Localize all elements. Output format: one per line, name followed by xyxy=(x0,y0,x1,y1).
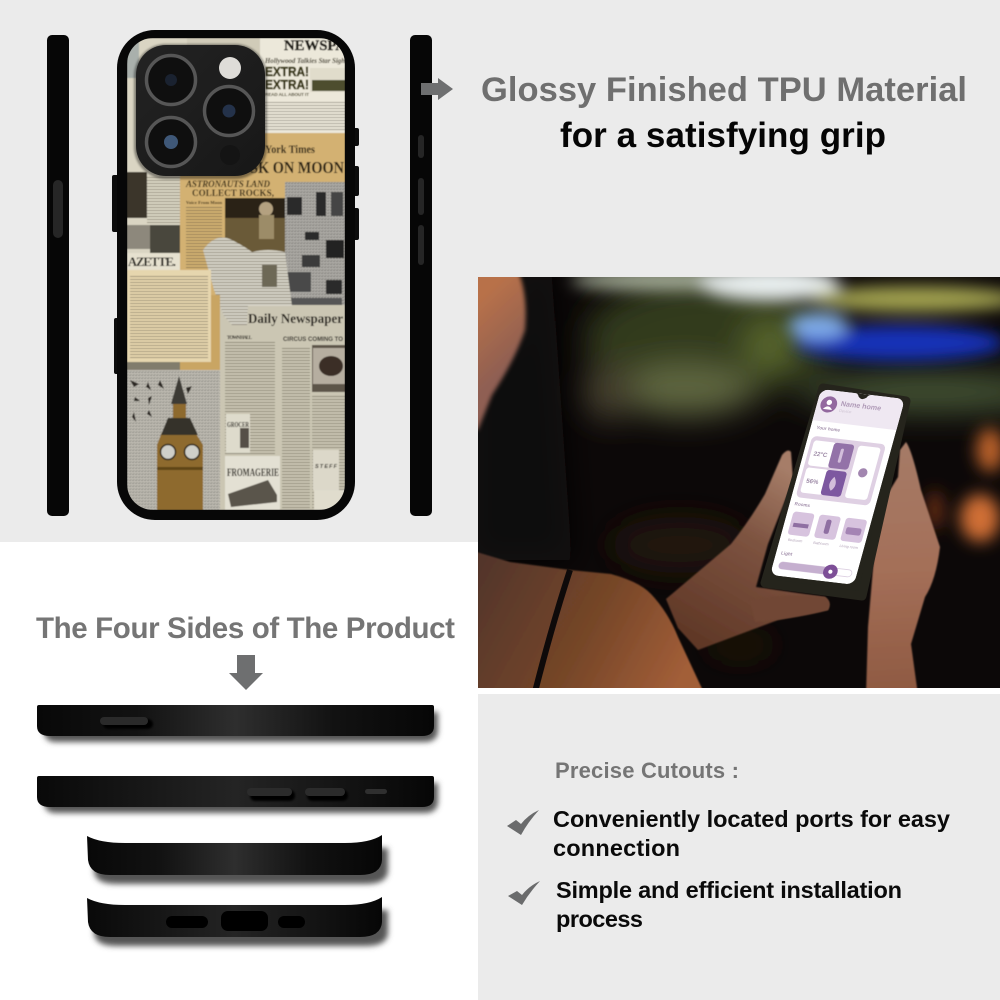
icon: check mark one xyxy=(507,810,539,835)
beige daily newspaper clipping: GROCER xyxy=(227,420,249,429)
tan moon landing clipping: York Times xyxy=(265,142,315,156)
case side buttons xyxy=(112,128,359,374)
bullet text two: Simple and efficient installation xyxy=(556,877,902,903)
light label: Light xyxy=(781,551,793,557)
beige daily newspaper clipping xyxy=(220,305,345,510)
lens top xyxy=(146,56,196,104)
hair xyxy=(470,270,572,560)
panel: top right heading background xyxy=(478,0,1000,277)
bullet text two xyxy=(556,877,902,932)
heading: glossy finished xyxy=(481,71,967,155)
lens right xyxy=(204,86,254,136)
subheading: precise cutouts: Precise Cutouts : xyxy=(555,758,739,783)
room tiles: Bathroom xyxy=(813,541,829,547)
left column clippings: AZETTE. xyxy=(128,255,176,269)
sensor xyxy=(220,145,240,165)
side bar: curved top edge xyxy=(87,835,388,884)
grey clipping xyxy=(285,182,345,308)
icon: check mark two xyxy=(508,881,540,905)
side bar: bottom edge with port cutouts xyxy=(87,897,388,946)
heading: four sides: The Four Sides of The Product xyxy=(36,612,455,645)
arrow pointing down xyxy=(229,655,263,690)
big ben clipping xyxy=(127,370,220,510)
home controls card xyxy=(796,436,886,506)
tan moon landing clipping: COLLECT ROCKS, xyxy=(192,188,274,198)
smartphone screen: Device xyxy=(838,408,853,414)
photo: person holding smartphone xyxy=(470,267,1000,695)
bullet text one xyxy=(553,806,950,861)
camera island xyxy=(134,44,267,179)
your home label: Your home xyxy=(816,425,841,433)
heading: glossy finished: for a satisfying grip xyxy=(560,116,886,155)
smartphone screen xyxy=(770,389,905,585)
side bar: top edge with one button xyxy=(37,705,438,742)
top right clipping: extra extra: READ ALL ABOUT IT xyxy=(265,92,309,97)
volume and power cutouts xyxy=(247,788,387,801)
tan moon landing clipping: Voice From Moon xyxy=(186,200,222,205)
top right clipping: extra extra: EXTRA! xyxy=(265,77,309,92)
home controls card: 22°C xyxy=(813,451,829,459)
side bar: edge with three buttons xyxy=(37,776,438,813)
fingers over phone xyxy=(776,595,830,620)
top right clipping: extra extra: Hollywood Talkies Star Sigh xyxy=(264,56,345,65)
dress strap xyxy=(535,570,570,692)
smartphone xyxy=(765,388,906,596)
room tiles xyxy=(785,511,868,550)
tan moon landing clipping: SK ON MOON xyxy=(250,158,345,177)
bullet text two: process xyxy=(556,906,643,932)
arrow pointing to heading xyxy=(421,78,453,100)
top right clipping: extra extra xyxy=(260,38,346,133)
left column clippings xyxy=(127,38,187,278)
panel: top left product background xyxy=(0,0,478,542)
shoulder xyxy=(470,550,705,695)
side view: left edge strip xyxy=(47,35,69,516)
beige daily newspaper clipping: CIRCUS COMING TO xyxy=(283,336,343,343)
bullet text one: Conveniently located ports for easy xyxy=(553,806,950,832)
app title: Name home xyxy=(840,399,882,413)
cream clipping xyxy=(127,270,220,373)
blurred background lights xyxy=(570,267,1000,654)
phone case with newspaper collage xyxy=(112,30,359,520)
beige daily newspaper clipping: TOWN HALL xyxy=(227,336,253,341)
collage artwork xyxy=(127,38,346,510)
right hand xyxy=(866,442,940,695)
room tiles: Bedroom xyxy=(787,538,803,543)
face edge xyxy=(478,277,529,432)
case body xyxy=(117,30,355,520)
lens bottom xyxy=(146,118,196,166)
beige daily newspaper clipping: STEFF xyxy=(315,464,338,470)
speaker, charging port and mic cutouts xyxy=(166,911,305,931)
tan moon landing clipping: ASTRONAUTS LAND xyxy=(185,179,270,189)
home controls card: 56% xyxy=(805,478,820,486)
flash xyxy=(219,57,241,79)
side view: right edge strip xyxy=(410,35,432,516)
button cutout xyxy=(103,719,153,729)
beige daily newspaper clipping: Daily Newspaper xyxy=(248,312,343,327)
heading: glossy finished: Glossy Finished TPU Material xyxy=(481,71,967,109)
light slider xyxy=(778,562,852,579)
room tiles: Living room xyxy=(839,544,858,550)
top right clipping: extra extra: NEWSPA xyxy=(284,38,346,54)
beige daily newspaper clipping: FROMAGERIE xyxy=(227,465,279,479)
rooms label: Rooms xyxy=(794,501,811,508)
tan moon landing clipping xyxy=(180,133,345,305)
panel: bottom right cutouts background xyxy=(478,694,1000,1000)
top right clipping: extra extra: EXTRA! xyxy=(265,64,309,79)
torn newsprint clipping xyxy=(203,238,292,325)
left hand xyxy=(666,451,829,650)
bullet text one: connection xyxy=(553,835,680,861)
